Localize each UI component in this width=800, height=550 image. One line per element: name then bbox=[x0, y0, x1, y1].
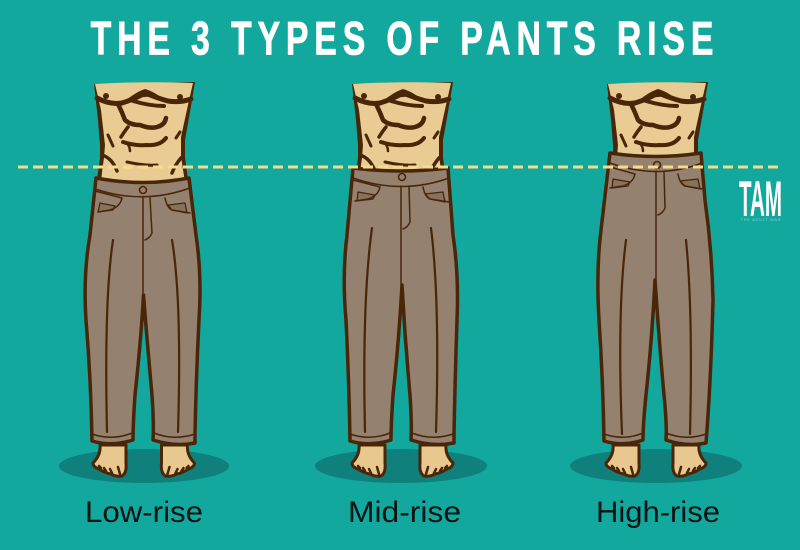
dashed rise reference line bbox=[18, 166, 782, 168]
torso: low-rise bbox=[94, 82, 195, 186]
pants: low-rise bbox=[85, 178, 200, 444]
label: mid-rise: Mid-rise bbox=[348, 496, 461, 529]
figure: low-rise bbox=[59, 82, 229, 529]
torso: mid-rise bbox=[352, 82, 453, 186]
floor shadow: high-rise bbox=[570, 449, 742, 483]
figure: mid-rise bbox=[315, 82, 487, 529]
logo: TAM: THE ADULT MAN bbox=[740, 217, 781, 222]
title: THE 3 TYPES OF PANTS RISE bbox=[91, 12, 713, 65]
feet: mid-rise bbox=[352, 445, 453, 476]
figure: high-rise bbox=[570, 82, 742, 529]
pants: mid-rise bbox=[344, 168, 458, 444]
floor shadow: mid-rise bbox=[315, 449, 487, 483]
feet: low-rise bbox=[93, 445, 194, 476]
floor shadow: low-rise bbox=[59, 449, 229, 483]
torso: high-rise bbox=[607, 82, 708, 186]
label: high-rise: High-rise bbox=[596, 496, 720, 529]
label: low-rise: Low-rise bbox=[85, 496, 203, 529]
pants: high-rise bbox=[598, 153, 713, 444]
feet: high-rise bbox=[606, 445, 706, 476]
